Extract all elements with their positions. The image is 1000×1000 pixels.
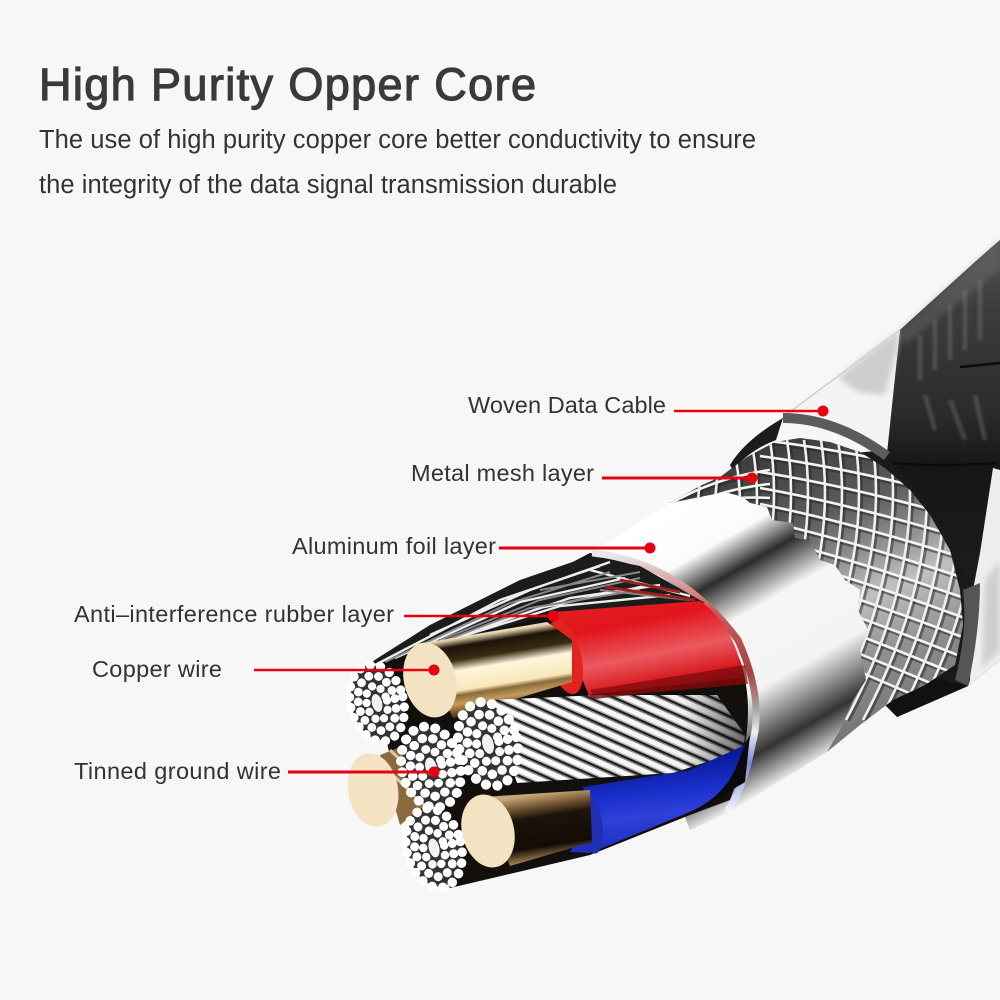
cable illustration [342, 240, 1000, 894]
strand end top left [342, 659, 412, 747]
twisted wires upper [362, 556, 705, 668]
aluminum foil layer [590, 440, 870, 830]
description text [39, 126, 756, 199]
label: copper wire: Copper wire [92, 656, 222, 682]
strand end silver [449, 696, 527, 792]
bundle interior [370, 553, 748, 888]
description text: The use of high purity copper core better conductivity to ensure [39, 126, 756, 154]
copper wire gold [396, 622, 572, 723]
label: anti-interference rubber layer: Anti–interference rubber layer [74, 601, 394, 627]
strand end bottom [398, 802, 470, 894]
label: woven data cable: Woven Data Cable [468, 392, 666, 418]
description text: the integrity of the data signal transmission durable [39, 171, 617, 199]
tinned wire silver [490, 680, 745, 783]
label: tinned ground wire [74, 758, 440, 784]
metal mesh layer [670, 438, 963, 752]
blue insulated wire [570, 735, 750, 856]
label: copper wire [92, 656, 440, 682]
red insulated wire [540, 601, 748, 698]
left copper end [342, 735, 445, 831]
label: anti-interference rubber layer [74, 601, 558, 627]
inner sleeve rim [783, 418, 887, 456]
label: aluminum foil layer: Aluminum foil layer [292, 533, 496, 559]
label: woven data cable [468, 392, 828, 418]
label: tinned ground wire: Tinned ground wire [74, 758, 281, 784]
label: aluminum foil layer [292, 533, 656, 559]
title: High Purity Opper Core [39, 59, 536, 110]
label: metal mesh layer [411, 460, 758, 486]
label: metal mesh layer: Metal mesh layer [411, 460, 594, 486]
strand end centre [393, 720, 469, 814]
foil opening rim [592, 553, 756, 812]
dark copper wire [454, 789, 592, 873]
woven sleeve [730, 240, 1000, 717]
